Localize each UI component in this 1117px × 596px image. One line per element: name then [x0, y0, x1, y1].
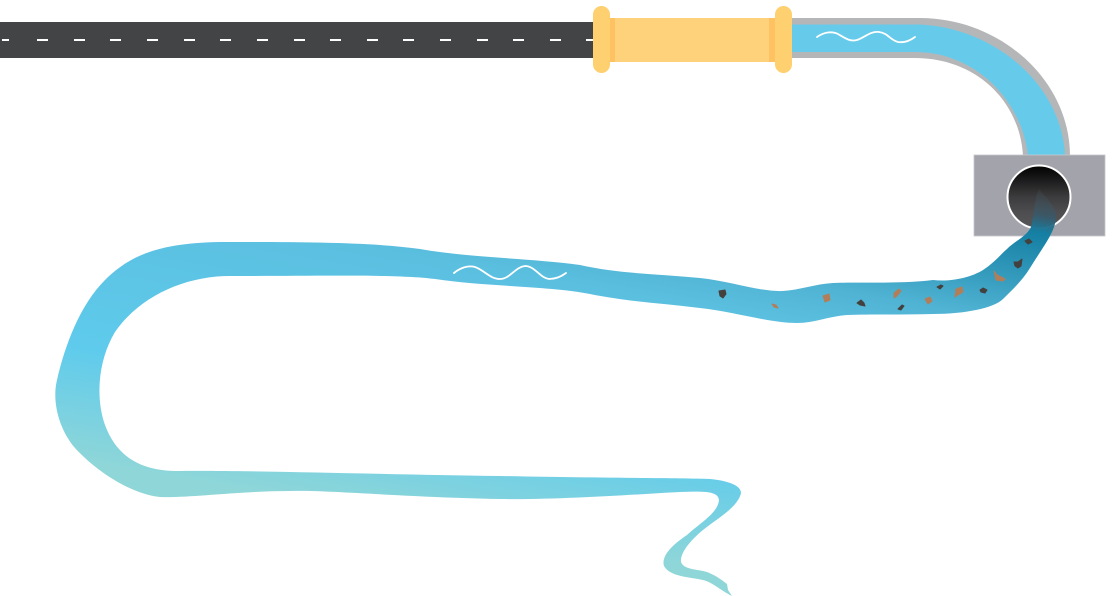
bridge section: [593, 6, 792, 73]
road: [0, 22, 600, 58]
river water wave: [454, 266, 566, 279]
dark debris pollutants: [719, 239, 1032, 310]
curved pipe with water: [790, 18, 1070, 156]
outlet headwall: [974, 155, 1105, 236]
river: [55, 189, 1056, 596]
pipe water wave: [817, 32, 915, 42]
brown debris pollutants: [772, 271, 1005, 308]
